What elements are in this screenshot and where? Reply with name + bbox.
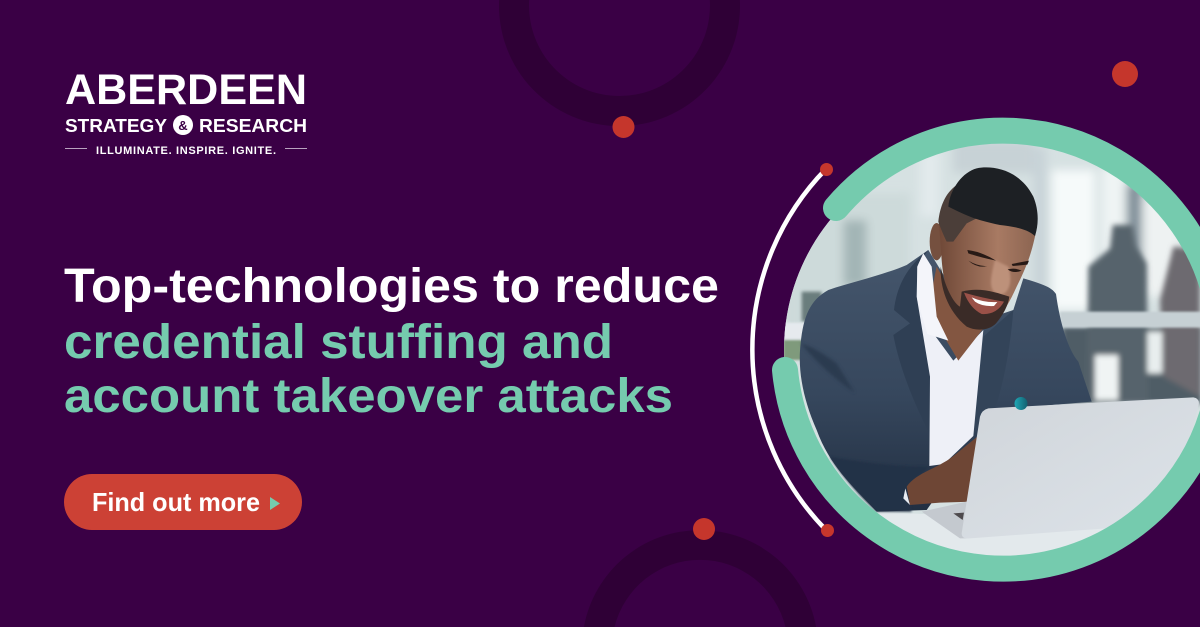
button: find out more [64,474,302,530]
teeth [972,297,997,306]
logo strategy and research line [65,115,307,136]
beard [941,267,1009,330]
icon: play arrow [270,497,280,510]
green ring arc [785,131,1200,569]
logo strategy and research line: RESEARCH [199,116,307,136]
headline line 3: account takeover attacks [64,370,673,423]
white arc [752,169,827,531]
eyes [968,261,1022,272]
ear [930,223,942,260]
nose highlight [991,260,1010,295]
mouth [964,293,1004,314]
decorative ring: top [499,0,740,126]
neck [933,266,982,360]
railing [783,312,1200,360]
laptop keyboard base [922,502,967,538]
hair [948,167,1038,236]
desk [877,512,1104,556]
arc end dot: top [820,163,833,176]
hand [907,437,977,505]
head [930,167,1038,330]
decorative ring: bottom [584,530,816,627]
logo strategy and research line: STRATEGY [65,116,167,136]
headline line 1: Top-technologies to reduce [64,260,719,313]
headline line 2: credential stuffing and [64,316,613,369]
logo tagline: ILLUMINATE. INSPIRE. IGNITE. [96,145,276,157]
dot: bottom centre [693,518,715,540]
man: jacket [800,250,1092,512]
logo wordmark: ABERDEEN [65,66,307,114]
dot: top centre [612,116,634,138]
button: find out more: Find out more [92,487,260,517]
eyebrows [967,250,1029,266]
logo [65,66,307,157]
dot: teal on laptop [1014,397,1028,410]
hair side fade [938,185,980,242]
arc end dot: bottom [821,524,834,537]
shirt collar [917,253,948,341]
shirt [917,253,983,466]
photo: man working on laptop [773,130,1200,577]
dot: top right [1112,61,1138,87]
headline [64,260,719,423]
jacket lapels and folds [801,250,1013,512]
office background [784,144,1200,514]
face [939,218,1038,306]
laptop lid [962,397,1199,538]
blurred people in background [1062,225,1200,403]
logo strategy and research line: & [178,118,188,133]
